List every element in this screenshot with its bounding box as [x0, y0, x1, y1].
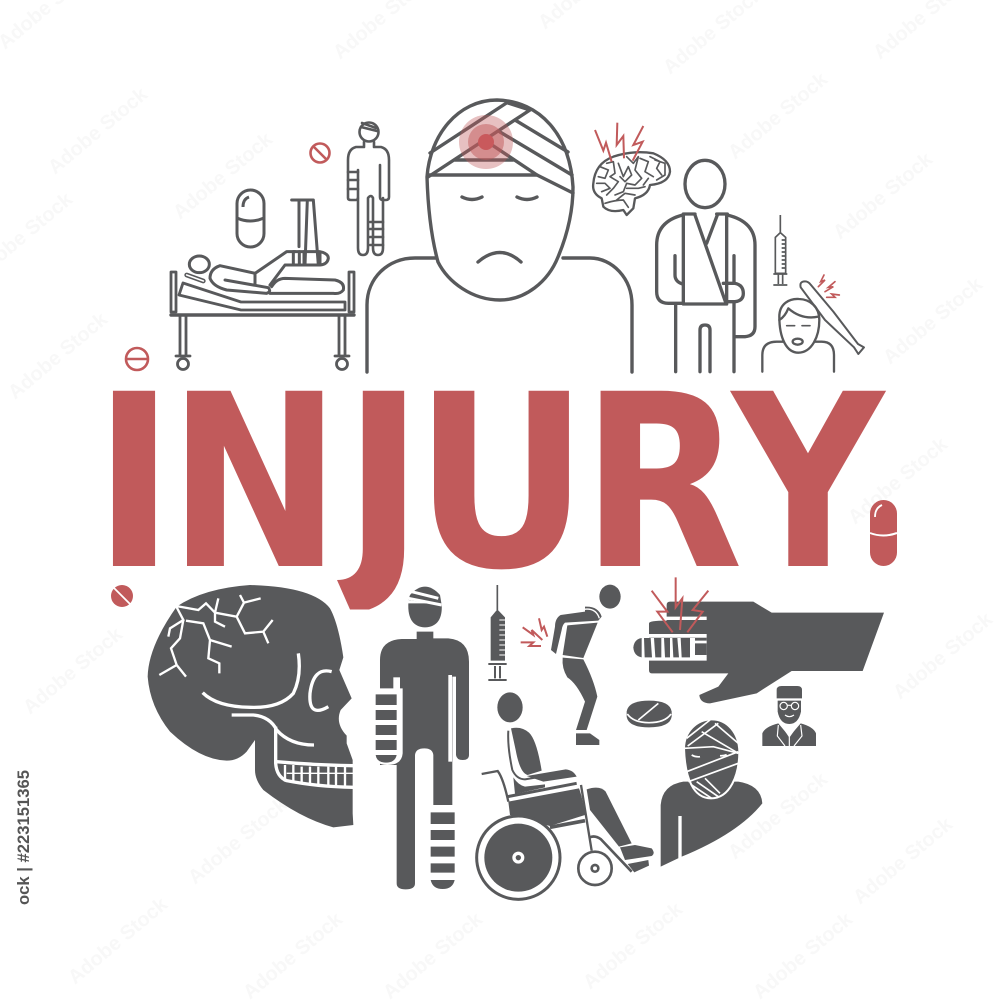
bone sutures [203, 653, 353, 787]
man with arm in sling [657, 160, 755, 372]
watermark: Adobe Stock [579, 898, 688, 994]
patient [187, 200, 344, 294]
title INJURY [112, 390, 886, 610]
hand with splinted finger [633, 577, 884, 703]
doctor [762, 686, 816, 746]
red burst [652, 577, 708, 632]
watermark: Adobe Stock [169, 128, 278, 224]
watermark: Adobe Stock [724, 68, 833, 164]
title INJURY: I [92, 343, 176, 623]
watermark: Adobe Stock [44, 83, 153, 179]
red impact bolts [818, 275, 839, 297]
leg cast [428, 805, 457, 892]
prohibition sign top [310, 144, 330, 162]
brain with lightning [593, 123, 670, 215]
title INJURY: U [414, 342, 589, 623]
man with bandaged head [661, 719, 762, 867]
title INJURY: Y [729, 343, 886, 624]
skull with cracks [148, 585, 353, 827]
solid man with casts [373, 587, 469, 892]
watermark: Adobe Stock [184, 793, 293, 889]
arm cast [373, 688, 403, 765]
finger splits [640, 618, 707, 659]
stock side text: ock | #223151365 [14, 770, 33, 905]
red bolts [595, 123, 643, 162]
watermark: Adobe Stock [879, 273, 988, 369]
watermark: Adobe Stock [829, 148, 938, 244]
small syringe outline [773, 215, 787, 285]
solid syringe [488, 585, 507, 680]
red capsule [870, 500, 897, 566]
red tablet [111, 585, 133, 607]
title INJURY: N [168, 343, 341, 623]
watermark: Adobe Stock [889, 608, 998, 704]
title INJURY: R [581, 343, 743, 624]
hospital bed with patient [171, 200, 354, 370]
watermark: Adobe Stock [844, 433, 953, 529]
prohibition sign left [126, 348, 148, 370]
red pain target [459, 115, 513, 169]
tablet [627, 701, 672, 727]
title INJURY: J [330, 344, 424, 623]
bandage lines [428, 102, 573, 193]
watermark: Adobe Stock [19, 623, 128, 719]
boy hit with bat [762, 275, 864, 372]
watermark: Adobe Stock [849, 813, 958, 909]
bed frame [171, 272, 354, 370]
watermark: Adobe Stock [4, 308, 113, 404]
watermark: Adobe Stock [724, 768, 833, 864]
small man with casts [348, 122, 389, 255]
wheelchair with person [477, 692, 654, 899]
large bandaged head and shoulders [367, 100, 632, 372]
red pain bolts [521, 618, 547, 646]
cracks [159, 595, 273, 677]
capsule outline [237, 190, 264, 247]
watermark: Adobe Stock [64, 893, 173, 989]
man with back pain [521, 585, 621, 745]
